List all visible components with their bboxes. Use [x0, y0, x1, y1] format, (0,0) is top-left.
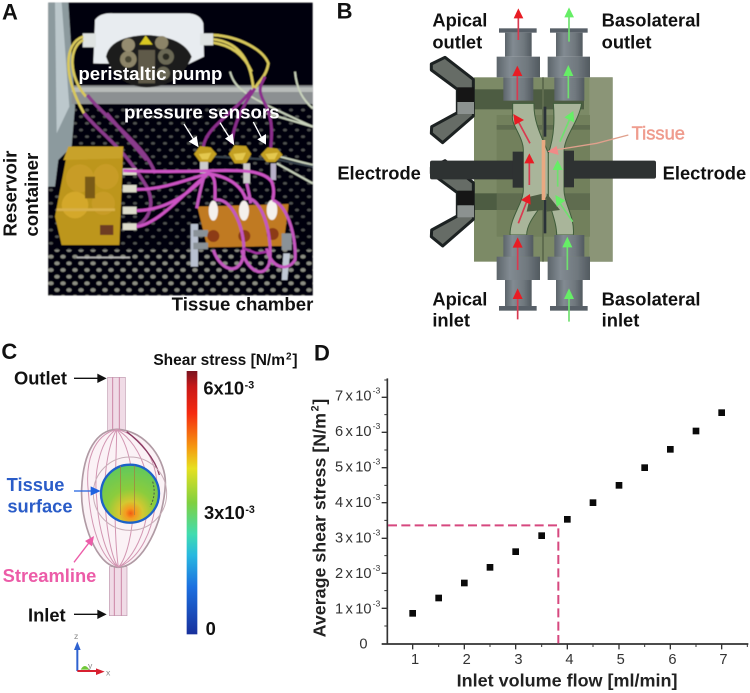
- electrodes: [430, 161, 520, 179]
- label: electrode right: Electrode: [663, 163, 746, 184]
- data points: [409, 409, 725, 617]
- y tick labels: -3: [373, 527, 381, 537]
- y axis title: Average shear stress [N/m: [309, 413, 329, 637]
- scale title: 2: [286, 352, 292, 363]
- icon: axis triad: x: [106, 668, 111, 678]
- y axis title: 2: [310, 405, 322, 411]
- x axis title: Inlet volume flow [ml/min]: [457, 671, 677, 691]
- wing nuts: [431, 57, 473, 143]
- panel D: shear stress vs inlet flow: [309, 341, 748, 691]
- arrows: apical flow: [512, 8, 534, 319]
- label: electrode left: Electrode: [337, 163, 421, 184]
- label: tissue surface with arrow: Tissue: [7, 474, 64, 495]
- y tick labels: -3: [373, 386, 381, 396]
- label: streamline with arrow: Streamline: [3, 565, 96, 586]
- y tick labels: 1 x 10: [335, 602, 372, 618]
- x tick labels: 5: [617, 652, 625, 668]
- label: inlet with arrow: [28, 605, 107, 626]
- y tick labels: -3: [373, 421, 381, 431]
- panel letter D: D: [314, 341, 330, 366]
- y tick labels: 3 x 10: [335, 530, 372, 546]
- x tick labels: 2: [463, 652, 471, 668]
- icon: axis triad: z: [74, 631, 78, 641]
- y axis title: ]: [309, 399, 329, 405]
- x tick labels: 4: [565, 652, 573, 668]
- label: peristaltic pump: peristaltic pump: [78, 63, 222, 84]
- label: basolateral outlet: outlet: [602, 31, 652, 52]
- simulation geometry: [82, 377, 167, 616]
- connectors: [499, 28, 537, 33]
- panel C: shear stress simulation: [1, 339, 298, 678]
- panel letter A: A: [2, 0, 18, 24]
- scale title: Shear stress [N/m: [153, 352, 285, 369]
- label: tissue: Tissue: [632, 122, 685, 143]
- label: streamline with arrow: [3, 536, 96, 586]
- label: inlet with arrow: Inlet: [28, 605, 66, 626]
- scale tick 6x10-3: -3: [245, 379, 254, 391]
- y tick labels: 6 x 10: [335, 424, 372, 440]
- label: reservoir: Reservoir: [0, 151, 21, 237]
- arrows: basolateral flow: [553, 7, 574, 322]
- y tick labels: -3: [373, 457, 381, 467]
- scale tick 6x10-3: 6x10: [203, 377, 244, 398]
- x tick labels: 6: [668, 652, 676, 668]
- label: tissue surface with arrow: [7, 474, 101, 517]
- label: container: container: [21, 153, 42, 237]
- icon: axis triad: y: [88, 660, 93, 670]
- scale tick 3x10-3: -3: [245, 504, 255, 516]
- x tick labels: [411, 652, 727, 668]
- y tick labels: -3: [373, 563, 381, 573]
- y tick labels: 7 x 10: [335, 389, 372, 405]
- label: tissue chamber: Tissue chamber: [172, 293, 313, 314]
- y tick labels: 2 x 10: [335, 566, 372, 582]
- chamber drawing: [430, 28, 656, 311]
- label: tissue surface with arrow: surface: [7, 496, 73, 517]
- label: basolateral inlet: [602, 288, 700, 331]
- axes: [382, 378, 748, 649]
- y tick labels: 4 x 10: [335, 495, 372, 511]
- label: basolateral outlet: [602, 10, 700, 52]
- x tick labels: 1: [411, 652, 419, 668]
- label: pressure sensors: pressure sensors: [124, 102, 280, 123]
- label: outlet with arrow: Outlet: [14, 367, 67, 388]
- panel letter C: C: [1, 339, 17, 364]
- colour scale bar: [187, 371, 197, 634]
- label: apical outlet: [432, 10, 487, 52]
- y tick labels: 5 x 10: [335, 460, 372, 476]
- tissue pointer: [547, 135, 628, 155]
- label: apical outlet: Apical: [432, 10, 487, 31]
- scale tick 0: 0: [206, 618, 216, 639]
- y tick labels: -3: [373, 599, 381, 609]
- y tick labels: 0: [359, 637, 367, 653]
- label: basolateral outlet: Basolateral: [602, 10, 700, 31]
- arrows: pressure sensors: [184, 122, 266, 147]
- x tick labels: 7: [719, 652, 727, 668]
- y tick labels: [335, 386, 381, 653]
- label: basolateral inlet: inlet: [602, 310, 639, 331]
- dashed reference lines: [388, 525, 558, 643]
- label: apical inlet: inlet: [432, 310, 470, 331]
- label: apical inlet: [432, 288, 487, 331]
- icon: axis triad: [74, 631, 111, 678]
- panel B: chamber cross-section: [337, 0, 746, 331]
- label: outlet with arrow: [14, 367, 107, 388]
- scale tick 3x10-3: 3x10: [204, 502, 245, 523]
- label: basolateral inlet: Basolateral: [602, 288, 700, 309]
- y tick labels: -3: [373, 492, 381, 502]
- panel A: photo of perfusion setup: [0, 0, 313, 314]
- label: apical inlet: Apical: [432, 288, 487, 309]
- scale title: ]: [292, 352, 298, 369]
- x tick labels: 3: [514, 652, 522, 668]
- photo: [48, 3, 313, 295]
- label: apical outlet: outlet: [432, 31, 482, 52]
